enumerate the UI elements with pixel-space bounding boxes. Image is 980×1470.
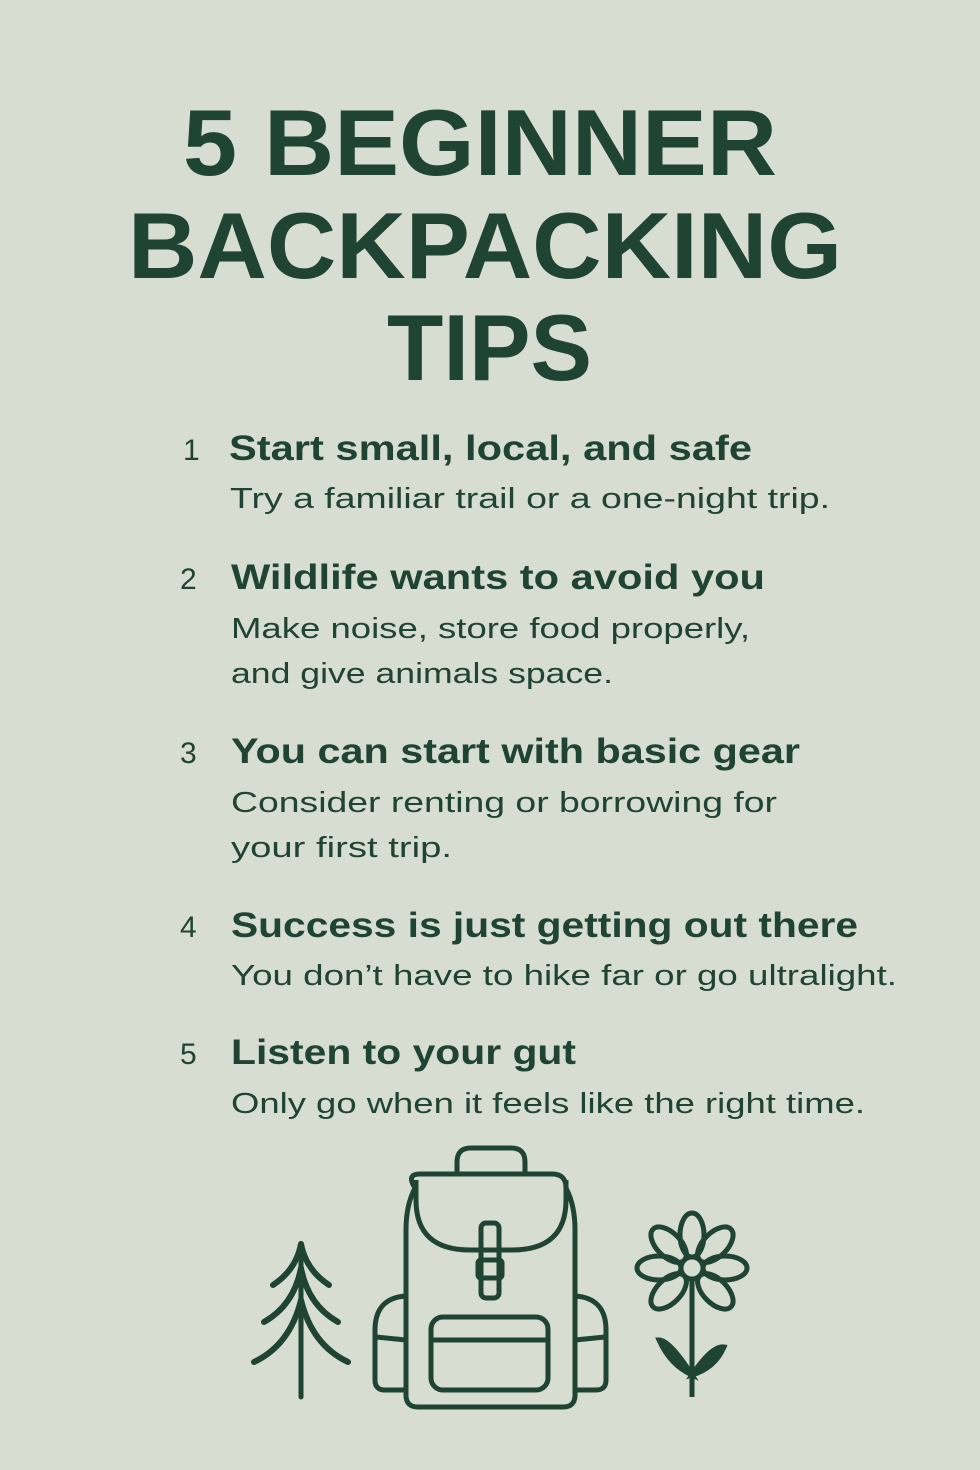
- tip 2: [180, 558, 765, 690]
- title: BACKPACKING: [128, 193, 842, 298]
- tip 4: Success is just getting out there: [231, 906, 858, 945]
- tip 1: Try a familiar trail or a one-night trip.: [230, 483, 830, 515]
- icon: pine tree: [254, 1244, 348, 1397]
- tip 5: Listen to your gut: [231, 1033, 576, 1072]
- tip 1: [183, 429, 830, 515]
- title: 5 BEGINNER: [183, 90, 777, 195]
- tip 4: You don’t have to hike far or go ultralight.: [231, 960, 897, 992]
- tip 3: Consider renting or borrowing for: [231, 787, 777, 819]
- tip 5: [180, 1033, 865, 1120]
- tip 1: Start small, local, and safe: [229, 429, 752, 468]
- tip 4: [180, 906, 897, 992]
- tip 2: Make noise, store food properly,: [231, 613, 750, 645]
- tip 2: 2: [180, 563, 197, 596]
- tip 3: You can start with basic gear: [231, 732, 800, 771]
- tip 2: Wildlife wants to avoid you: [231, 558, 765, 597]
- tip 3: your first trip.: [231, 832, 452, 864]
- tip 3: 3: [180, 737, 197, 770]
- title: TIPS: [387, 295, 592, 400]
- title: [128, 90, 842, 400]
- tip 4: 4: [180, 911, 197, 944]
- tip 1: 1: [183, 434, 200, 467]
- tip 5: 5: [180, 1038, 197, 1071]
- tip 3: [180, 732, 800, 864]
- tip 2: and give animals space.: [231, 658, 613, 690]
- tip 5: Only go when it feels like the right time.: [231, 1088, 865, 1120]
- icon: backpack: [375, 1148, 606, 1407]
- icon: flower: [637, 1213, 747, 1397]
